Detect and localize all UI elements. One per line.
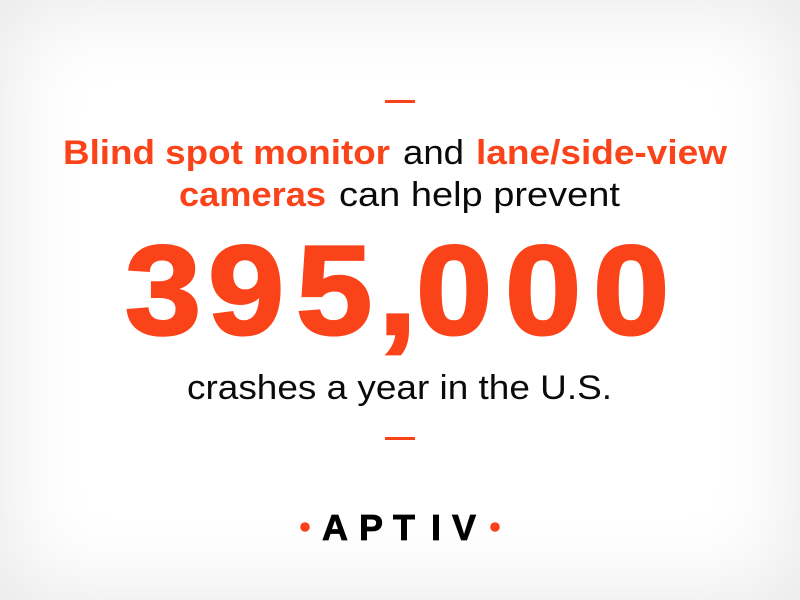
bottom divider dash [385, 437, 415, 440]
heading text block: and [403, 134, 464, 172]
big number: 000 [416, 220, 669, 362]
subtext: crashes a year in the U.S. [187, 369, 612, 407]
heading text block: Blind spot monitor [63, 134, 390, 172]
big number: 395 [125, 220, 372, 362]
logo wordmark: APTIV [322, 507, 476, 548]
heading text block: cameras [179, 176, 326, 214]
heading text block: lane/side-view [476, 134, 728, 172]
logo dot right [490, 522, 500, 532]
heading text block [63, 134, 728, 214]
heading text block: can help prevent [339, 176, 621, 214]
big number: , [378, 217, 417, 362]
logo: APTIV [300, 507, 500, 548]
logo dot left [300, 522, 310, 532]
top divider dash [385, 100, 415, 103]
